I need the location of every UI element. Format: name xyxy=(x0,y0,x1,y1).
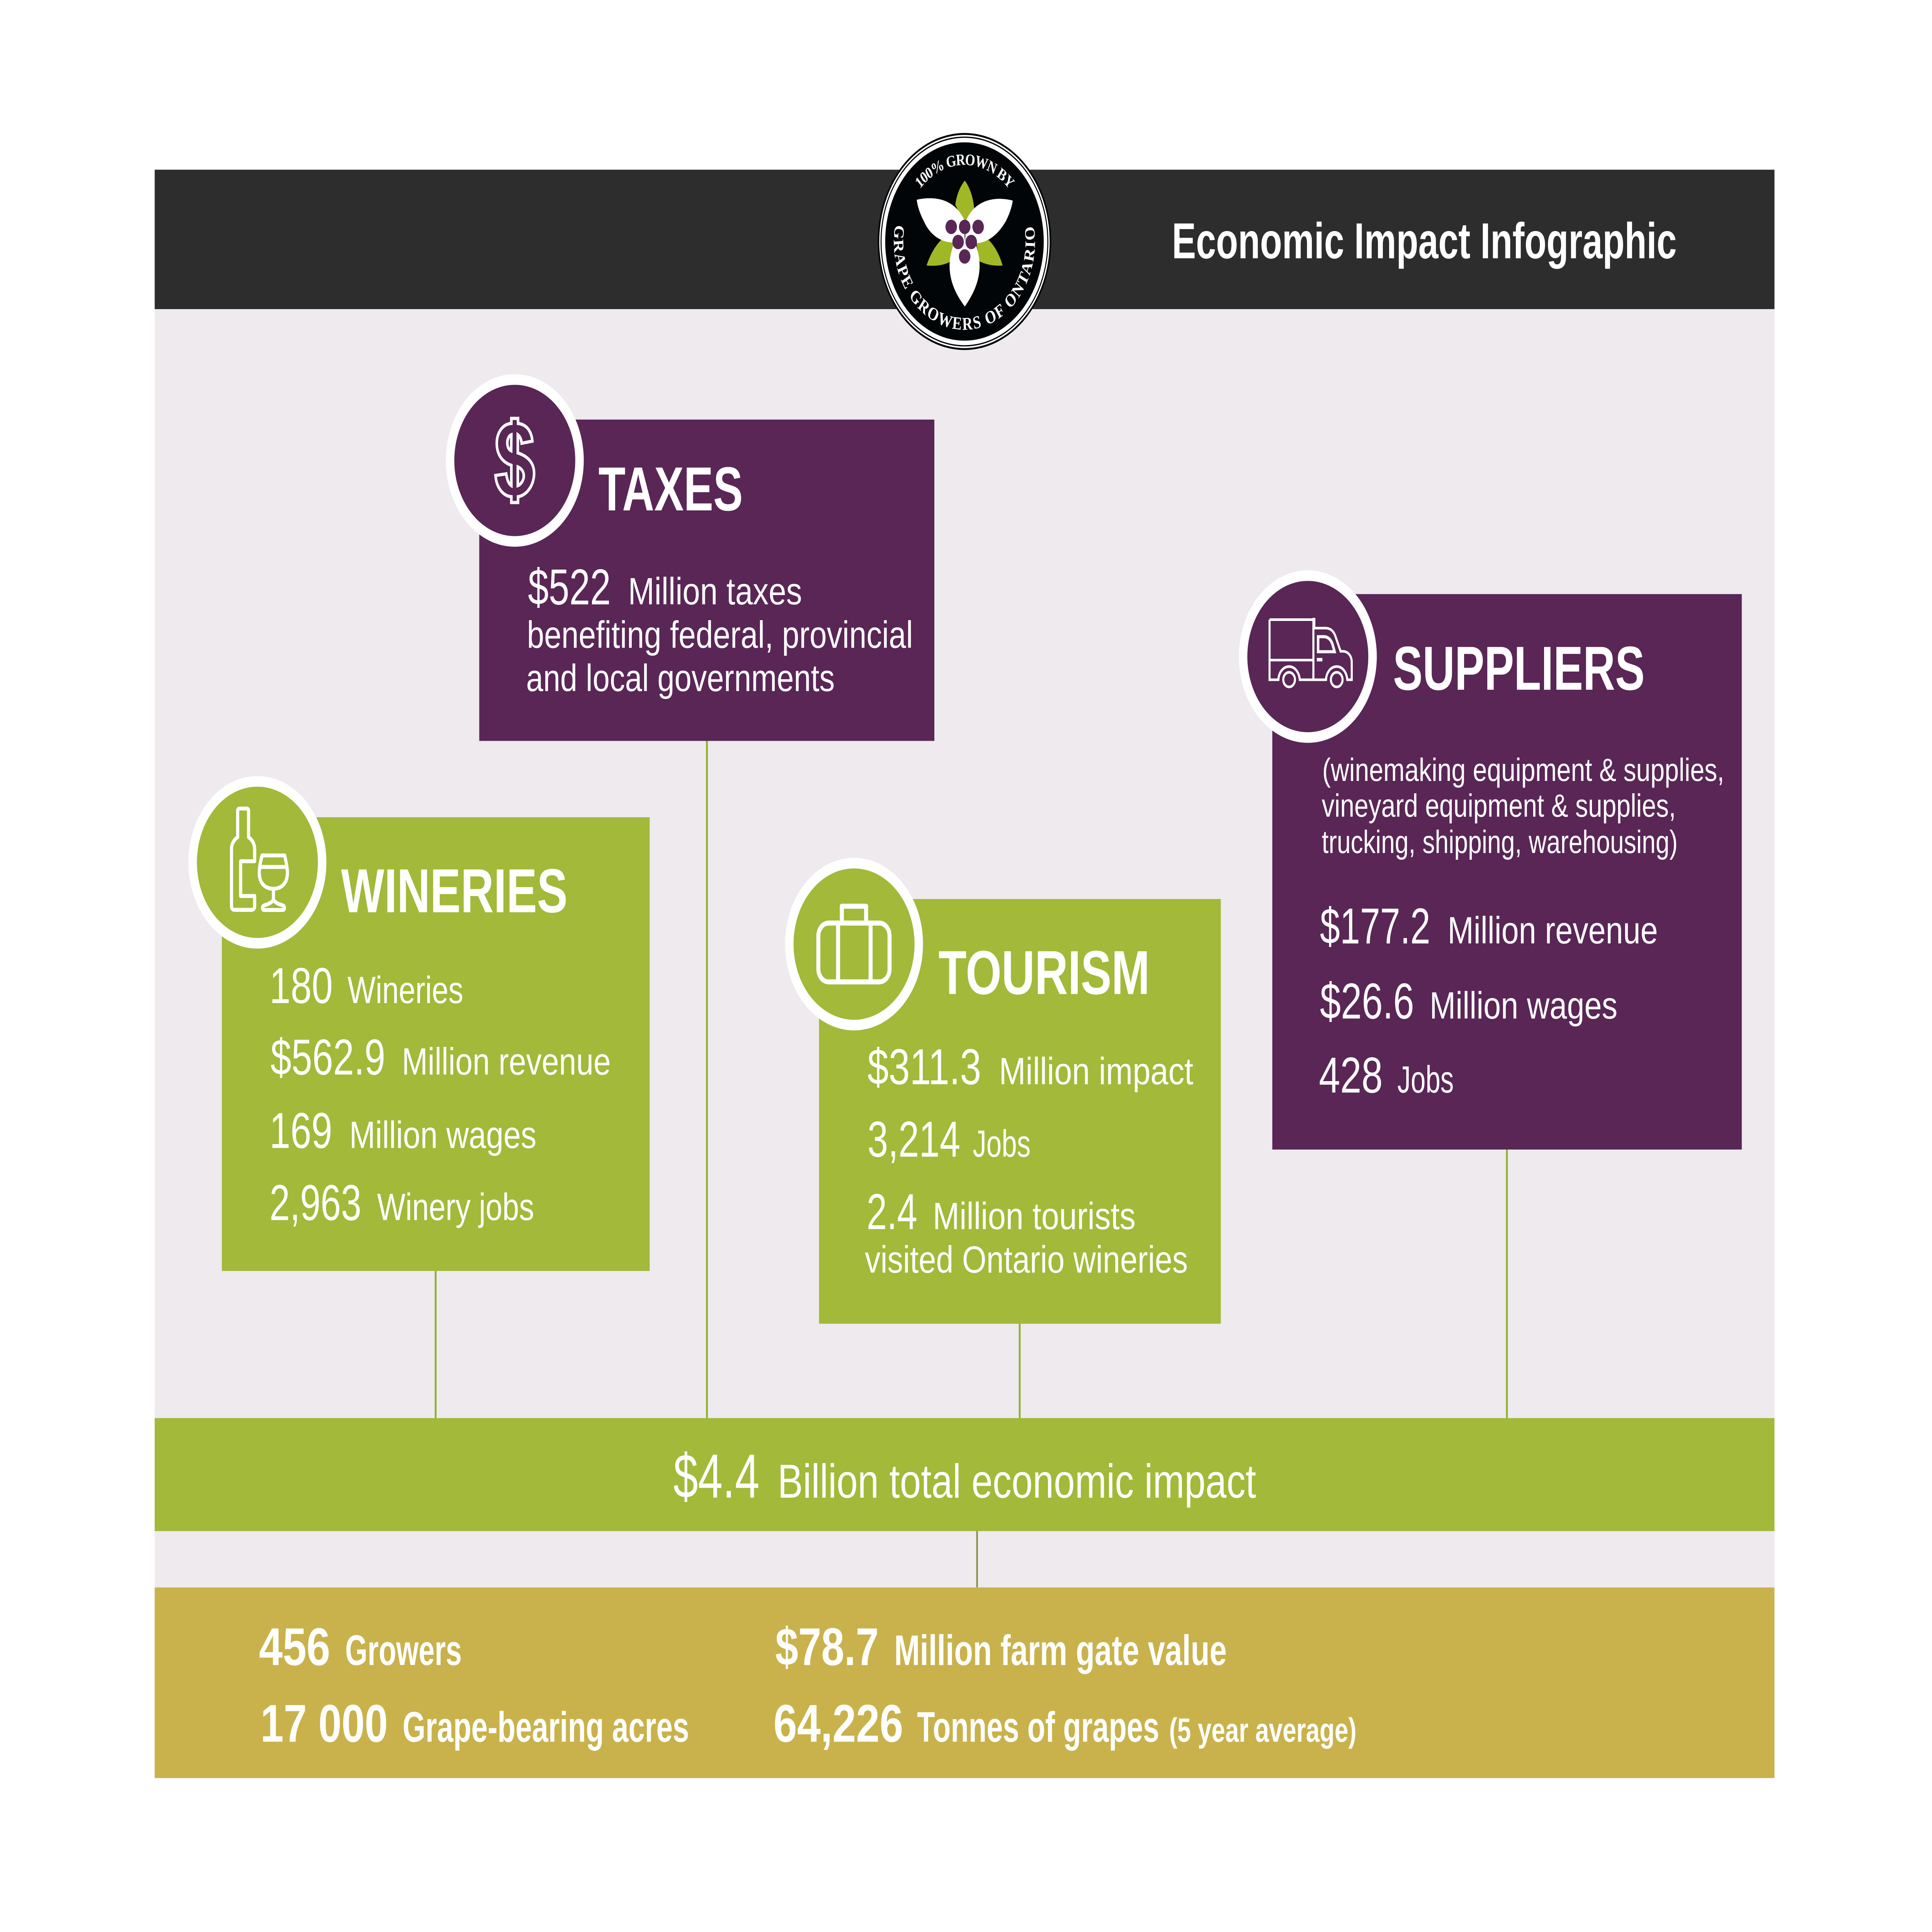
title: Economic Impact Infographic xyxy=(1172,213,1677,269)
tourism background xyxy=(819,899,1221,1324)
wineries revenue: $562.9 xyxy=(270,1029,385,1086)
suppliers revenue xyxy=(1320,898,1658,954)
suppliers jobs xyxy=(1319,1047,1454,1104)
total impact band: Billion total economic impact xyxy=(777,1454,1256,1508)
tourism impact: $311.3 xyxy=(867,1039,981,1095)
tourism jobs: Jobs xyxy=(973,1122,1031,1165)
tourism visitors: visited Ontario wineries xyxy=(865,1238,1188,1281)
header bar xyxy=(155,170,1774,309)
taxes description xyxy=(526,570,913,699)
icon: suitcase badge xyxy=(785,858,923,1031)
suppliers scope note: trucking, shipping, warehousing) xyxy=(1322,824,1678,860)
wineries jobs: 2,963 xyxy=(269,1175,361,1231)
tourism visitors xyxy=(865,1184,1188,1281)
wineries jobs: Winery jobs xyxy=(377,1185,534,1228)
wineries count xyxy=(269,958,463,1014)
wineries wages: Million wages xyxy=(349,1113,536,1156)
farm gate value xyxy=(775,1617,1227,1677)
tonnes: 64,226 xyxy=(774,1694,903,1753)
growers band xyxy=(155,1587,1774,1778)
tourism visitors: Million tourists xyxy=(933,1194,1136,1237)
suppliers revenue: $177.2 xyxy=(1320,898,1430,954)
icon: dollar sign badge xyxy=(446,374,584,547)
suppliers background xyxy=(1272,594,1742,1150)
tonnes xyxy=(774,1694,1357,1753)
logo trillium flower and grapes xyxy=(917,180,1013,306)
tourism jobs xyxy=(867,1111,1031,1168)
acres xyxy=(260,1694,689,1753)
icon: bottle and glass badge xyxy=(189,776,327,949)
taxes description: Million taxes xyxy=(628,570,802,612)
farm gate value: $78.7 xyxy=(775,1617,879,1677)
suppliers jobs: 428 xyxy=(1319,1047,1383,1104)
suppliers wages: $26.6 xyxy=(1320,973,1414,1030)
tonnes: Tonnes of grapes xyxy=(917,1703,1159,1751)
tourism impact xyxy=(867,1039,1193,1095)
icon: delivery truck badge xyxy=(1239,570,1377,743)
acres: Grape-bearing acres xyxy=(403,1703,689,1751)
farm gate value: Million farm gate value xyxy=(894,1627,1227,1674)
connector: taxes to total xyxy=(706,741,708,1418)
suppliers wages: Million wages xyxy=(1430,984,1617,1027)
suppliers revenue: Million revenue xyxy=(1447,909,1658,952)
growers count xyxy=(259,1617,462,1677)
suppliers jobs: Jobs xyxy=(1397,1058,1454,1100)
panel: tourism xyxy=(785,858,1221,1324)
taxes description: benefiting federal, provincial xyxy=(527,613,913,656)
wineries revenue xyxy=(270,1029,611,1086)
wineries revenue: Million revenue xyxy=(402,1040,611,1083)
connector: wineries to total xyxy=(435,1271,437,1418)
panel: taxes xyxy=(446,374,934,741)
panel: suppliers xyxy=(1239,570,1742,1150)
wineries count: Wineries xyxy=(347,968,463,1011)
taxes description: and local governments xyxy=(526,656,835,699)
tourism visitors: 2.4 xyxy=(867,1184,917,1240)
total impact band xyxy=(155,1418,1774,1531)
growers count: Growers xyxy=(345,1627,462,1674)
suppliers scope note xyxy=(1322,752,1724,860)
taxes heading: TAXES xyxy=(599,454,743,524)
panel: wineries xyxy=(189,776,650,1271)
total impact band: $4.4 xyxy=(673,1442,760,1511)
tourism heading: TOURISM xyxy=(939,938,1150,1007)
suppliers wages xyxy=(1320,973,1617,1030)
tourism jobs: 3,214 xyxy=(867,1111,960,1168)
suppliers scope note: vineyard equipment & supplies, xyxy=(1322,787,1676,823)
acres: 17 000 xyxy=(260,1694,388,1753)
taxes background xyxy=(479,420,934,741)
connector: total to growers xyxy=(976,1531,978,1587)
growers count: 456 xyxy=(259,1617,330,1677)
logo lower text: GRAPE GROWERS OF ONTARIO xyxy=(890,224,1039,334)
tourism impact: Million impact xyxy=(999,1049,1193,1092)
wineries count: 180 xyxy=(269,958,333,1014)
background panel xyxy=(155,309,1774,1587)
wineries heading: WINERIES xyxy=(341,856,568,925)
wineries jobs xyxy=(269,1175,534,1231)
tonnes: (5 year average) xyxy=(1169,1711,1357,1749)
connector: suppliers to total xyxy=(1506,1150,1508,1418)
wineries wages xyxy=(269,1103,536,1159)
logo upper text: 100% GROWN BY xyxy=(912,151,1017,192)
suppliers scope note: (winemaking equipment & supplies, xyxy=(1322,752,1724,788)
wineries wages: 169 xyxy=(269,1103,332,1159)
logo: Grape Growers of Ontario seal xyxy=(878,133,1051,350)
taxes figure: $522 xyxy=(528,559,611,616)
wineries background xyxy=(222,817,650,1271)
suppliers heading: SUPPLIERS xyxy=(1393,633,1645,703)
connector: tourism to total xyxy=(1019,1324,1020,1418)
